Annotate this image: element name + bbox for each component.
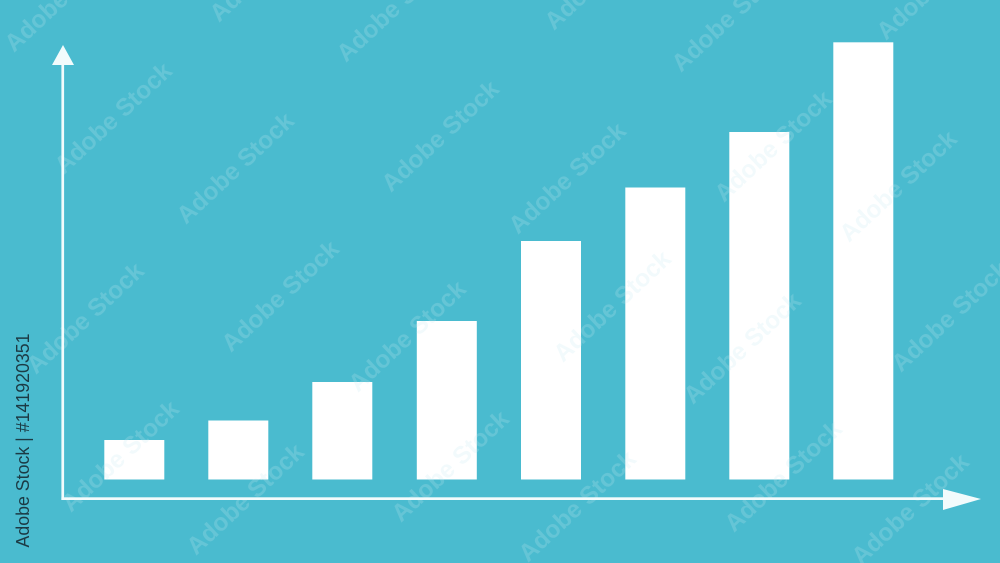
watermark: Adobe Stock [835,125,963,247]
watermark over bars: Adobe Stock [344,275,472,397]
stock id text: Adobe Stock | #141920351 [13,334,33,548]
bar 4 [417,321,477,480]
watermark: Adobe Stock [50,57,178,179]
bar 7 [729,132,789,480]
bar 2 [208,420,268,480]
watermark: Adobe Stock [217,235,345,357]
bar 8 [833,42,893,480]
watermark over bars: Adobe Stock [679,287,807,409]
watermark: Adobe Stock [182,438,310,560]
bar 3 [312,382,372,480]
bars [104,42,893,480]
watermark over bars: Adobe Stock [835,125,963,247]
watermark: Adobe Stock [172,107,300,229]
watermark over bars: Adobe Stock [182,438,310,560]
x axis arrow [61,489,981,510]
watermark: Adobe Stock [22,257,150,379]
watermark over bars: Adobe Stock [720,415,848,537]
watermark over bars: Adobe Stock [57,395,185,517]
watermark: Adobe Stock [57,395,185,517]
watermark: Adobe Stock [679,287,807,409]
watermark: Adobe Stock [710,85,838,207]
watermark: Adobe Stock [344,275,472,397]
bar 6 [625,188,685,480]
watermark over bars: Adobe Stock [549,245,677,367]
watermark over bars [104,132,893,480]
watermark: Adobe Stock [549,245,677,367]
watermark over bars: Adobe Stock [387,405,515,527]
watermark: Adobe Stock [504,117,632,239]
bar 5 [521,241,581,480]
watermark: Adobe Stock [720,415,848,537]
watermark over bars: Adobe Stock [710,85,838,207]
y axis arrow [52,45,74,500]
watermark: Adobe Stock [377,75,505,197]
bar 1 [104,440,164,480]
watermark: Adobe Stock [387,405,515,527]
watermark over bars: Adobe Stock [504,117,632,239]
